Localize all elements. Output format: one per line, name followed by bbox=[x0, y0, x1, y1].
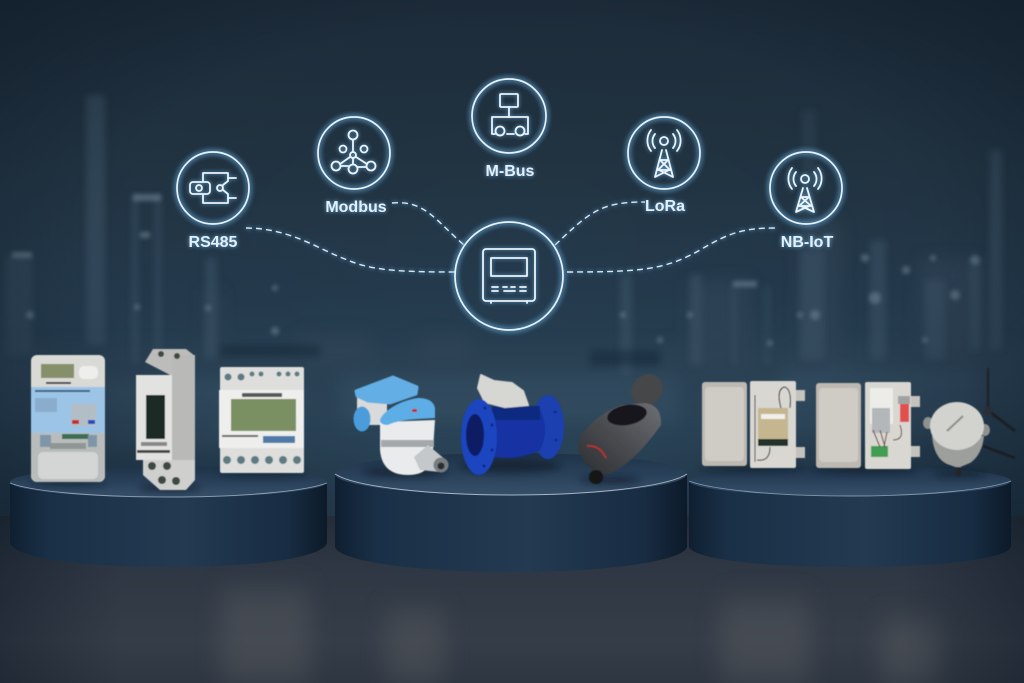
product: DIN rail meter bbox=[136, 349, 195, 490]
product: black smart water meter bbox=[578, 367, 670, 484]
node: NB-IoT bbox=[770, 152, 842, 251]
floor reflections bbox=[220, 590, 940, 683]
hub: central meter icon bbox=[455, 222, 563, 330]
label: NB-IoT: NB-IoT bbox=[781, 234, 833, 251]
panel: left podium bbox=[10, 466, 327, 567]
node: M-Bus bbox=[472, 79, 546, 180]
panel: middle podium bbox=[335, 453, 687, 572]
label: M-Bus: M-Bus bbox=[486, 163, 535, 180]
background: wall vignette bbox=[0, 0, 1024, 520]
product: prepaid electricity meter bbox=[31, 355, 105, 482]
icon: Modbus network bbox=[332, 130, 376, 174]
node: RS485 bbox=[177, 152, 249, 251]
product: open enclosure with meter bbox=[816, 382, 920, 469]
product: round wireless sensor bbox=[923, 368, 1015, 476]
product: blue-top water meter bbox=[354, 377, 448, 475]
floor edge shading bbox=[0, 516, 1024, 683]
label: LoRa: LoRa bbox=[645, 198, 685, 215]
background: blurred industrial skyline bbox=[0, 95, 1024, 450]
label: Modbus: Modbus bbox=[325, 199, 387, 216]
node: Modbus bbox=[318, 117, 390, 216]
background: floor bbox=[0, 516, 1024, 683]
product: three-phase meter bbox=[219, 367, 304, 473]
icon: M-Bus bbox=[492, 94, 528, 136]
icon: NB-IoT tower bbox=[788, 168, 822, 212]
icon: meter bbox=[483, 249, 535, 303]
background: wall bbox=[0, 0, 1024, 520]
product shadows bbox=[30, 459, 985, 492]
icon: LoRa tower bbox=[647, 130, 681, 177]
panel: right podium bbox=[689, 466, 1011, 567]
node: LoRa bbox=[628, 117, 700, 215]
connector lines bbox=[246, 182, 775, 370]
product: flanged blue water meter bbox=[461, 375, 564, 475]
label: RS485: RS485 bbox=[189, 234, 238, 251]
icon: RS485 connector bbox=[190, 173, 236, 203]
product: open enclosure with gateway bbox=[702, 381, 805, 468]
